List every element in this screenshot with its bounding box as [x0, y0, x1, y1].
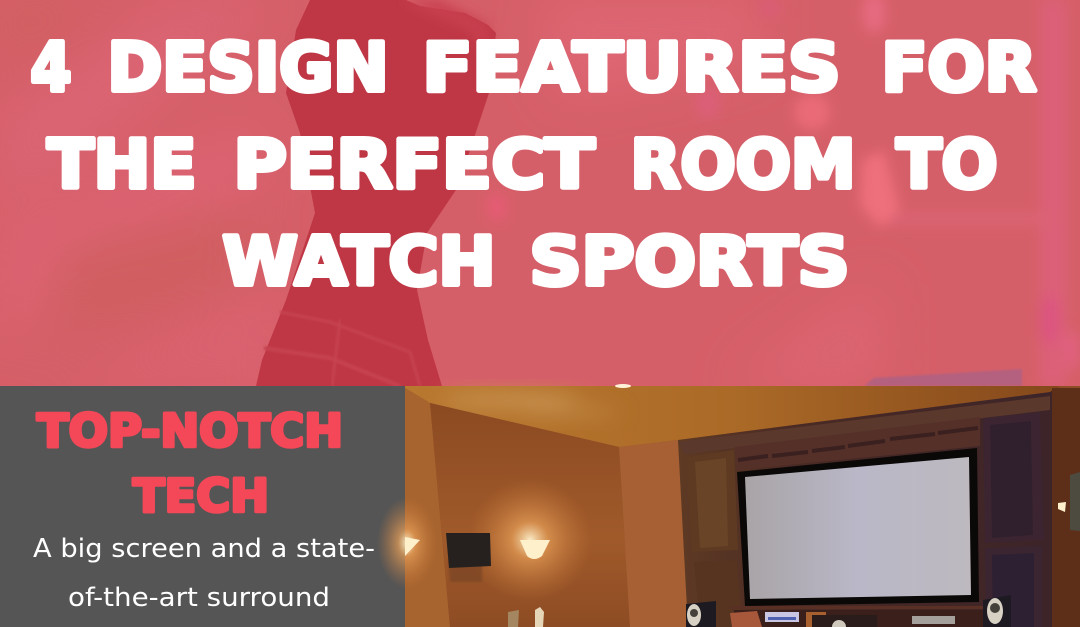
- cabinet: [678, 388, 1056, 627]
- text block: description: [33, 534, 375, 613]
- wall speaker: [446, 533, 491, 582]
- back wall: [430, 403, 630, 627]
- ceiling light: [615, 384, 631, 388]
- title: 4: [30, 28, 72, 106]
- title: PERFECT: [234, 126, 595, 204]
- title: WATCH: [222, 222, 496, 300]
- text block: description: A big screen and a state-: [33, 534, 375, 564]
- image: home theater room: [377, 384, 1080, 627]
- right device: [1058, 472, 1080, 531]
- left wall: [405, 388, 450, 627]
- title: TO: [896, 126, 998, 204]
- title: THE: [48, 126, 196, 204]
- title: SPORTS: [530, 222, 850, 300]
- heading: top-notch tech: TOP-NOTCH: [37, 404, 343, 458]
- projection screen: [737, 448, 979, 606]
- title: DESIGN: [108, 28, 388, 106]
- text block: description: of-the-art surround: [68, 583, 330, 613]
- right wall: [1052, 388, 1080, 627]
- title: ROOM: [630, 126, 856, 204]
- image: raised fist: [256, 0, 507, 386]
- title: FOR: [882, 28, 1036, 106]
- panel: top-notch tech: [0, 386, 405, 627]
- title: FEATURES: [422, 28, 840, 106]
- ceiling: [405, 386, 1060, 447]
- guitars: [508, 607, 544, 627]
- wall sconce light: [468, 478, 592, 602]
- corner wall: [619, 440, 688, 627]
- panel: hero background: [0, 0, 1080, 386]
- heading: top-notch tech: TECH: [133, 470, 269, 522]
- right tower speaker: [983, 595, 1011, 627]
- left sconce light: [377, 497, 437, 589]
- title: [30, 28, 1036, 300]
- heading: top-notch tech: [37, 404, 343, 522]
- left tower speaker: [686, 601, 716, 627]
- media console: [730, 606, 985, 627]
